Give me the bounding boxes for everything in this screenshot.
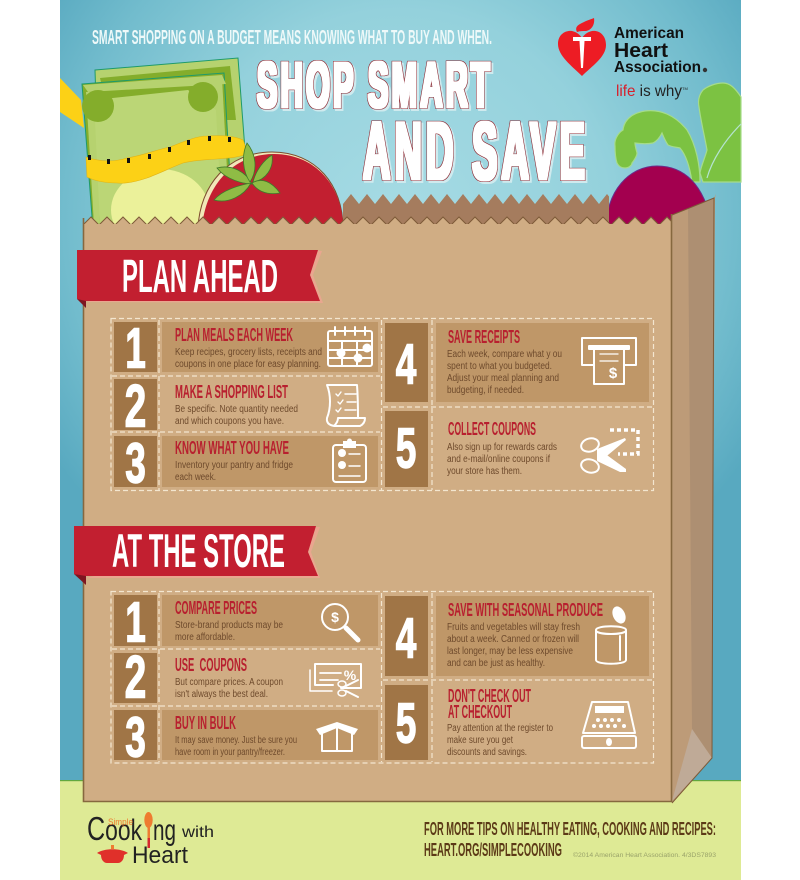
icon: clipboard xyxy=(333,438,366,482)
step 4: seasonal produce: Fruits and vegetables will stay fresh xyxy=(447,622,580,633)
step 5: don't check out: Pay attention at the register to xyxy=(447,723,553,734)
icon: box xyxy=(316,722,358,751)
logo: Simple Cooking with Heart: Heart xyxy=(132,842,188,869)
step 3: know what you have: KNOW WHAT YOU HAVE xyxy=(175,437,289,458)
sky background xyxy=(60,0,741,781)
step 4: save receipts: Adjust your meal planning and xyxy=(447,373,559,384)
icon: magnifying glass xyxy=(322,604,358,640)
tomato xyxy=(198,152,343,228)
logo: American Heart Association xyxy=(558,18,707,100)
step 4: seasonal produce: 4 xyxy=(396,607,417,671)
logo: Simple Cooking with Heart: Cook xyxy=(87,810,143,847)
step 4: save receipts: SAVE RECEIPTS xyxy=(448,326,520,347)
icon: coupon and scissors: % xyxy=(344,667,357,683)
step 1: compare prices: more affordable. xyxy=(175,632,235,643)
logo: Simple Cooking with Heart: ng xyxy=(153,814,176,847)
step 4: seasonal produce: and can be just as healthy. xyxy=(447,658,545,669)
step 2: use coupons: isn't always the best deal. xyxy=(175,689,268,700)
icon: receipt machine xyxy=(582,338,636,384)
step 5: collect coupons: Also sign up for rewards cards xyxy=(447,442,557,453)
money xyxy=(82,58,250,251)
step 1: compare prices xyxy=(114,591,378,655)
logo: American Heart Association: American xyxy=(614,25,684,42)
step 5: don't check out: make sure you get xyxy=(447,735,513,746)
banner: at the store: AT THE STORE xyxy=(112,524,285,577)
step 4: save receipts: Each week, compare what y ou xyxy=(447,349,562,360)
step 2: use coupons: But compare prices. A coupon xyxy=(175,677,283,688)
step 5: collect coupons xyxy=(385,411,638,487)
step 1: plan meals xyxy=(114,317,378,381)
step 1: compare prices: Store-brand products may be xyxy=(175,620,283,631)
step 5: collect coupons: COLLECT COUPONS xyxy=(448,418,536,439)
step 4: save receipts: spent to what you budgeted. xyxy=(447,361,552,372)
beet leaves xyxy=(615,83,741,182)
step 4: save receipts xyxy=(385,323,649,402)
step 1: plan meals: coupons in one place for easy planning. xyxy=(175,359,321,370)
logo: American Heart Association: life is why xyxy=(616,83,682,100)
logo: Simple Cooking with Heart: Simple xyxy=(108,817,133,827)
icon: magnifying glass: $ xyxy=(331,609,339,625)
step 1: plan meals: Keep recipes, grocery lists, receipts and xyxy=(175,347,322,358)
icon: calendar xyxy=(328,327,372,366)
step 1: compare prices: COMPARE PRICES xyxy=(175,597,257,618)
step 3: buy in bulk: have room in your pantry/freezer. xyxy=(175,747,285,758)
step 3: know what you have: Inventory your pantry and fridge xyxy=(175,460,293,471)
step 2: shopping list: Be specific. Note quantity needed xyxy=(175,404,298,415)
logo: American Heart Association: Heart xyxy=(614,40,668,62)
step 2: use coupons xyxy=(114,643,361,711)
step 3: buy in bulk xyxy=(114,706,378,770)
title xyxy=(257,49,589,197)
panel: plan ahead steps xyxy=(111,317,654,496)
step 1: plan meals: 1 xyxy=(125,317,146,381)
step 1: compare prices: 1 xyxy=(125,591,146,655)
icon: scissors xyxy=(580,430,638,475)
title: SHOP SMART xyxy=(257,49,493,121)
step 2: shopping list: 2 xyxy=(125,372,146,440)
footer: more tips xyxy=(424,818,716,860)
step 4: seasonal produce xyxy=(385,596,649,676)
icon: receipt machine: $ xyxy=(609,365,618,382)
step 3: know what you have: 3 xyxy=(125,432,146,496)
panel: at the store steps xyxy=(111,591,654,770)
step 5: collect coupons: your store has them. xyxy=(447,466,522,477)
banner: plan ahead xyxy=(77,250,323,308)
step 5: don't check out: discounts and savings. xyxy=(447,747,527,758)
step 3: know what you have: each week. xyxy=(175,472,216,483)
step 2: use coupons: USE COUPONS xyxy=(175,654,247,675)
icon: cash register xyxy=(582,702,636,748)
step 4: save receipts: 4 xyxy=(396,333,417,397)
step 5: don't check out: AT CHECKOUT xyxy=(448,701,512,722)
back of bag xyxy=(343,194,609,229)
banner: plan ahead: PLAN AHEAD xyxy=(122,250,278,302)
step 3: buy in bulk: 3 xyxy=(125,706,146,770)
logo: Simple Cooking with Heart: with xyxy=(181,824,214,841)
icon: shopping list xyxy=(327,385,365,426)
paper bag xyxy=(83,194,716,803)
icon: coupon and scissors xyxy=(310,664,361,697)
step 5: collect coupons: 5 xyxy=(396,417,416,481)
footer: more tips: HEART.ORG/SIMPLECOOKING xyxy=(424,839,562,860)
step 4: seasonal produce: SAVE WITH SEASONAL PRODUCE xyxy=(448,599,603,620)
step 5: don't check out: DON'T CHECK OUT xyxy=(448,685,531,706)
step 5: don't check out xyxy=(385,685,636,760)
step 3: buy in bulk: BUY IN BULK xyxy=(175,712,236,733)
step 3: know what you have xyxy=(114,432,378,496)
measuring tape xyxy=(60,78,245,183)
step 4: seasonal produce: about a week. Canned or frozen will xyxy=(447,634,579,645)
step 5: don't check out: 5 xyxy=(396,692,416,756)
logo: Simple Cooking with Heart xyxy=(87,810,214,869)
step 2: use coupons: 2 xyxy=(125,643,146,711)
step 2: shopping list xyxy=(114,372,365,440)
tomato leaves xyxy=(214,143,280,201)
step 1: plan meals: PLAN MEALS EACH WEEK xyxy=(175,324,293,345)
step 5: collect coupons: and e-mail/online coupons if xyxy=(447,454,550,465)
copyright: ©2014 American Heart Association. 4/3DS7893 xyxy=(573,851,716,859)
step 4: save receipts: budgeting, if needed. xyxy=(447,385,524,396)
icon: can xyxy=(596,604,628,664)
step 4: seasonal produce: last longer, may be less expensive xyxy=(447,646,573,657)
logo: American Heart Association: Association xyxy=(614,59,701,76)
logo: American Heart Association: TM xyxy=(682,86,688,91)
step 2: shopping list: MAKE A SHOPPING LIST xyxy=(175,381,288,402)
beet xyxy=(606,166,712,230)
ground xyxy=(60,780,741,880)
step 3: buy in bulk: It may save money. Just be sure you xyxy=(175,735,297,746)
banner: at the store xyxy=(74,524,320,585)
step 2: shopping list: and which coupons you have. xyxy=(175,416,284,427)
